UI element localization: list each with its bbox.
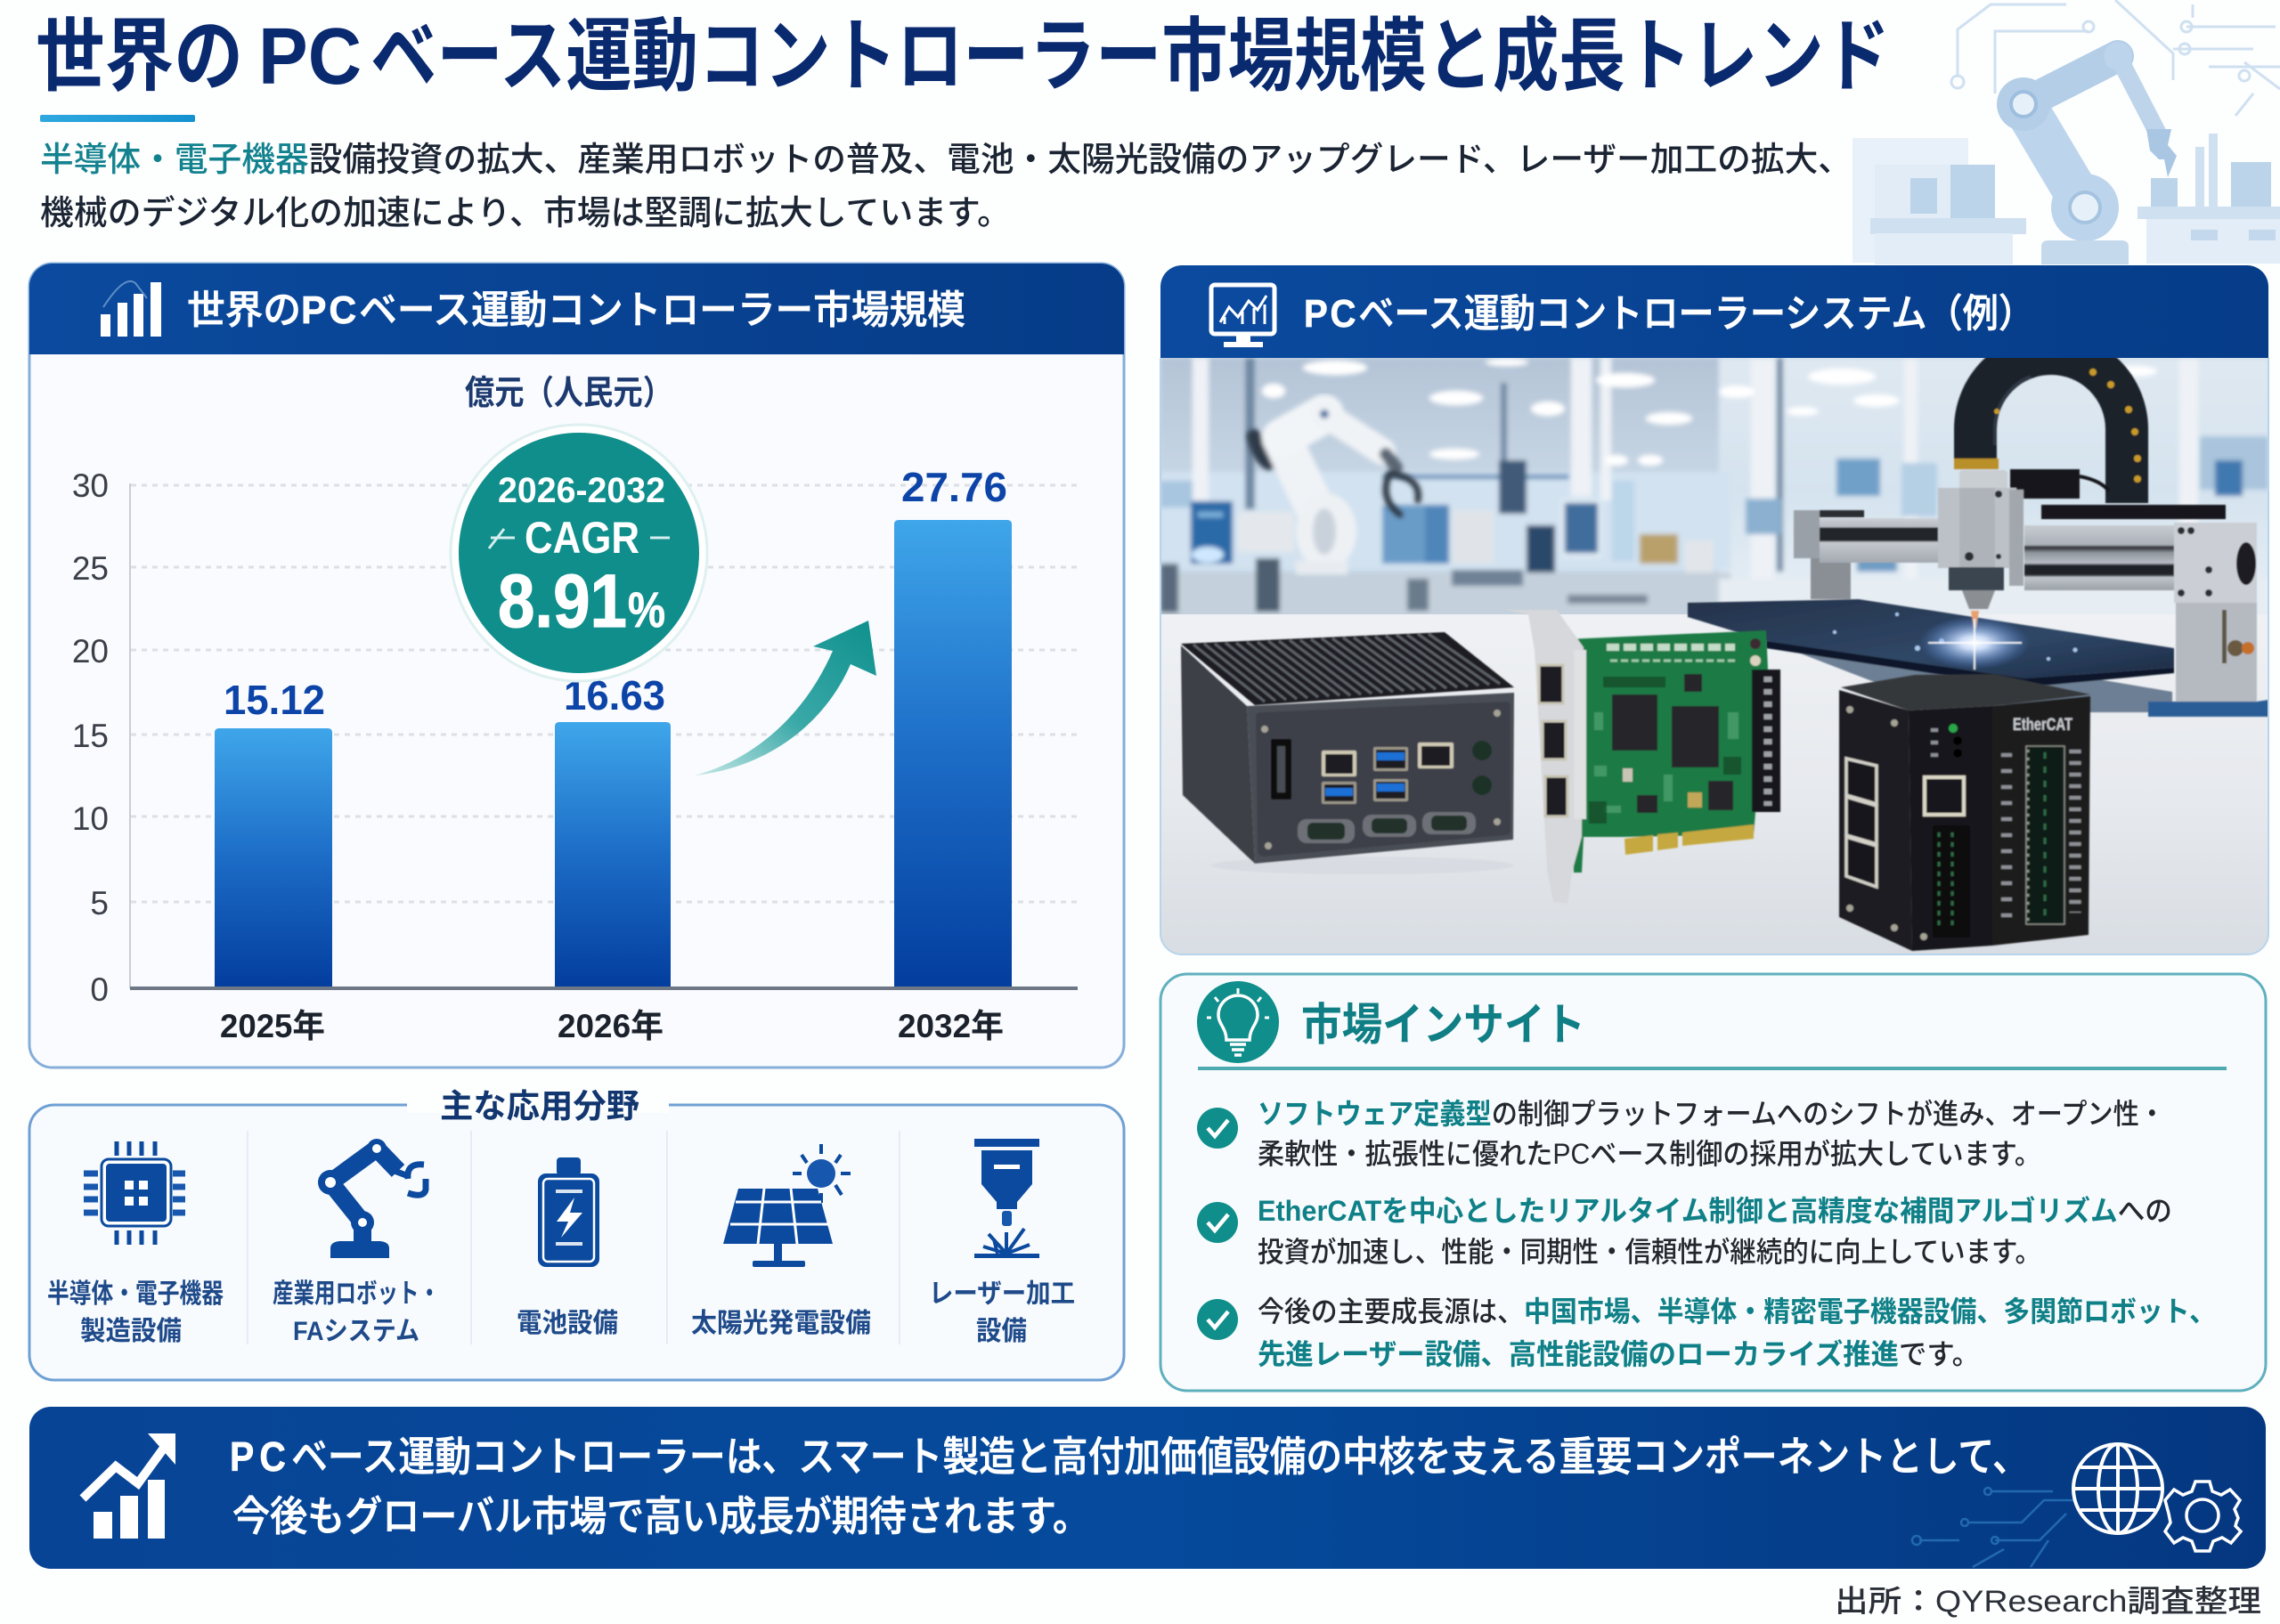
icon: battery	[538, 1157, 599, 1267]
insight 3: 先進レーザー設備、高性能設備のローカライズ推進です。	[1258, 1338, 1980, 1370]
insight 2: EtherCATを中心としたリアルタイム制御と高精度な補間アルゴリズムへの	[1258, 1195, 2172, 1227]
label: laser: レーザー加工	[929, 1279, 1075, 1309]
CAGR badge: 2026-2032	[498, 471, 665, 510]
icon: growth chart	[83, 1433, 175, 1539]
value labels: 15.12	[224, 677, 325, 723]
year labels: 2026年	[558, 1008, 664, 1044]
icon: light bulb	[1197, 981, 1279, 1063]
year labels: 2032年	[898, 1008, 1004, 1044]
year labels	[220, 1008, 1004, 1044]
subtitle text: 半導体・電子機器設備投資の拡大、産業用ロボットの普及、電池・太陽光設備のアップグレード、レーザー加工の拡大、	[40, 142, 1852, 179]
banner text: 今後もグローバル市場で高い成長が期待されます。	[232, 1493, 1090, 1539]
growth arrow	[695, 621, 876, 775]
source note: 出所：QYResearch調査整理	[1835, 1585, 2261, 1619]
CAGR badge: 8.91	[498, 559, 627, 643]
panel: system example photo	[1160, 265, 2271, 956]
label: robots: FAシステム	[293, 1317, 419, 1346]
device: box industrial PC	[1181, 632, 1514, 874]
insight 1	[1197, 1098, 2165, 1170]
title	[36, 12, 1890, 102]
device: PCIe motion card	[1506, 610, 1780, 904]
title: ベース運動コントローラー市場規模と成長トレンド	[370, 12, 1890, 102]
label: robots	[273, 1279, 440, 1346]
desk surface	[1160, 614, 2268, 956]
icon: gear	[2165, 1482, 2241, 1551]
insight 3	[1197, 1295, 2216, 1370]
bar chart: 20	[72, 633, 109, 670]
panel: market size chart	[29, 264, 1124, 1068]
label: solar: 太陽光発電設備	[691, 1309, 871, 1338]
chart unit label: 億元（人民元）	[465, 375, 672, 412]
title: PC	[258, 12, 362, 102]
bar chart: 30	[72, 467, 109, 504]
blurred factory background	[1160, 358, 2271, 625]
background illustration: robot and circuits	[1852, 0, 2280, 264]
insight 3: 今後の主要成長源は、中国市場、半導体・精密電子機器設備、多関節ロボット、	[1258, 1295, 2216, 1328]
device: EtherCAT IO module: EtherCAT	[2013, 716, 2072, 735]
value labels	[224, 464, 1007, 723]
panel header: market size: 世界のPCベース運動コントローラー市場規模	[187, 288, 965, 332]
label: semiconductor: 製造設備	[80, 1317, 182, 1346]
label: semiconductor: 半導体・電子機器	[47, 1279, 224, 1309]
icon: laser processing	[974, 1139, 1039, 1258]
title: 世界の	[36, 12, 243, 102]
subtitle text: 機械のデジタル化の加速により、市場は堅調に拡大しています。	[40, 195, 1011, 232]
panel: main application fields	[29, 1088, 1124, 1380]
icon: semiconductor chip	[84, 1141, 185, 1245]
label: robots: 産業用ロボット・	[273, 1279, 440, 1309]
conclusion banner	[29, 1407, 2266, 1569]
insights heading: 市場インサイト	[1301, 1000, 1585, 1050]
label: laser	[929, 1279, 1075, 1346]
label: laser: 設備	[976, 1317, 1027, 1346]
bar chart: 15	[72, 718, 109, 754]
insight 1: ソフトウェア定義型の制御プラットフォームへのシフトが進み、オープン性・	[1258, 1098, 2165, 1130]
icon: robot arm	[318, 1139, 426, 1258]
banner text	[230, 1433, 2029, 1539]
decorative circuit lines	[1912, 1488, 2075, 1567]
subtitle text	[40, 142, 1852, 232]
panel: market insights	[1160, 974, 2266, 1391]
banner text: PCベース運動コントローラーは、スマート製造と高付加価値設備の中核を支える重要コンポーネントとして、	[230, 1433, 2029, 1480]
title accent line	[40, 115, 195, 122]
panel header: market size	[29, 264, 1124, 354]
panel header: system example	[1160, 265, 2268, 360]
bar chart: 5	[90, 885, 109, 922]
value labels: 27.76	[901, 464, 1007, 510]
insight 2	[1197, 1195, 2172, 1268]
bar 2025	[215, 728, 332, 988]
label: semiconductor	[47, 1279, 224, 1346]
panel heading: applications: 主な応用分野	[440, 1088, 639, 1125]
icon: globe	[2073, 1444, 2162, 1533]
insight 1: 柔軟性・拡張性に優れたPCベース制御の採用が拡大しています。	[1258, 1138, 2041, 1170]
CAGR badge: CAGR	[525, 513, 639, 563]
label: battery: 電池設備	[517, 1309, 618, 1338]
device: EtherCAT IO module	[1839, 674, 2090, 951]
CAGR badge: %	[628, 581, 665, 637]
bar chart	[72, 464, 1078, 1044]
blurred white robot	[1254, 410, 1418, 574]
insight 2: 投資が加速し、性能・同期性・信頼性が継続的に向上しています。	[1258, 1236, 2041, 1268]
bar 2032	[894, 520, 1012, 988]
value labels: 16.63	[564, 672, 665, 719]
bar chart: 25	[72, 550, 109, 587]
laser gantry machine	[1688, 353, 2268, 717]
panel header: system example: PCベース運動コントローラーシステム（例）	[1304, 292, 2034, 336]
year labels: 2025年	[220, 1008, 325, 1044]
bar chart: 0	[90, 971, 109, 1008]
CAGR badge	[451, 425, 707, 681]
bar chart: 10	[72, 800, 109, 837]
bar 2026	[555, 722, 671, 988]
photo: factory scene with controllers	[1160, 353, 2271, 956]
icon: solar panel	[723, 1144, 851, 1267]
